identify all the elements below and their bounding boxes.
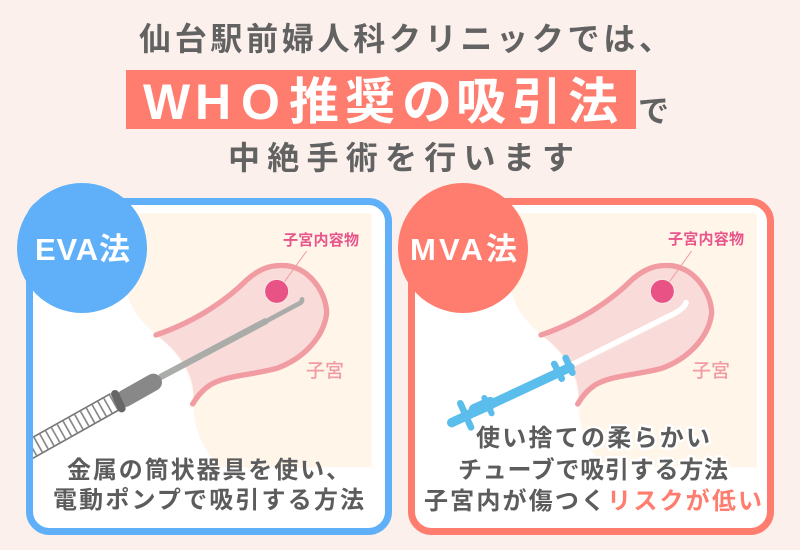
EVA description: 電動ポンプで吸引する方法 — [53, 487, 364, 514]
label: uterine contents: 子宮内容物 — [283, 231, 359, 249]
badge: EVA: EVA法 — [35, 232, 130, 267]
title particle: で — [638, 94, 669, 129]
panel: MVA method — [412, 202, 770, 532]
MVA description: 使い捨ての柔らかい — [476, 425, 710, 452]
label: uterus: 子宮 — [306, 360, 344, 382]
label: uterine contents: 子宮内容物 — [668, 230, 744, 248]
EVA description: 金属の筒状器具を使い、 — [67, 457, 350, 484]
badge: MVA — [398, 183, 528, 313]
title line 1: 仙台駅前婦人科クリニックでは、 — [139, 21, 671, 57]
uterine contents dot — [650, 251, 692, 303]
hose — [20, 402, 115, 455]
panel: EVA method — [20, 202, 389, 532]
syringe — [452, 358, 572, 427]
EVA description — [53, 457, 364, 514]
flexible tube — [573, 303, 686, 364]
badge: MVA: MVA法 — [410, 232, 517, 267]
EVA illustration — [20, 213, 372, 467]
MVA illustration — [452, 213, 757, 467]
uterine contents dot — [265, 251, 307, 303]
MVA description: チューブで吸引する方法 — [458, 456, 728, 484]
handle — [115, 382, 153, 408]
title — [126, 21, 671, 176]
uterus — [541, 265, 712, 404]
highlight band: WHO推奨の吸引法 — [143, 74, 618, 130]
badge: EVA — [17, 183, 147, 313]
label: uterus: 子宮 — [692, 360, 730, 382]
cannula — [160, 299, 302, 377]
MVA description: 子宮内が傷つくリスクが低い — [424, 487, 762, 515]
MVA description — [424, 425, 762, 515]
uterus — [156, 265, 327, 404]
title line 3: 中絶手術を行います — [228, 140, 574, 176]
